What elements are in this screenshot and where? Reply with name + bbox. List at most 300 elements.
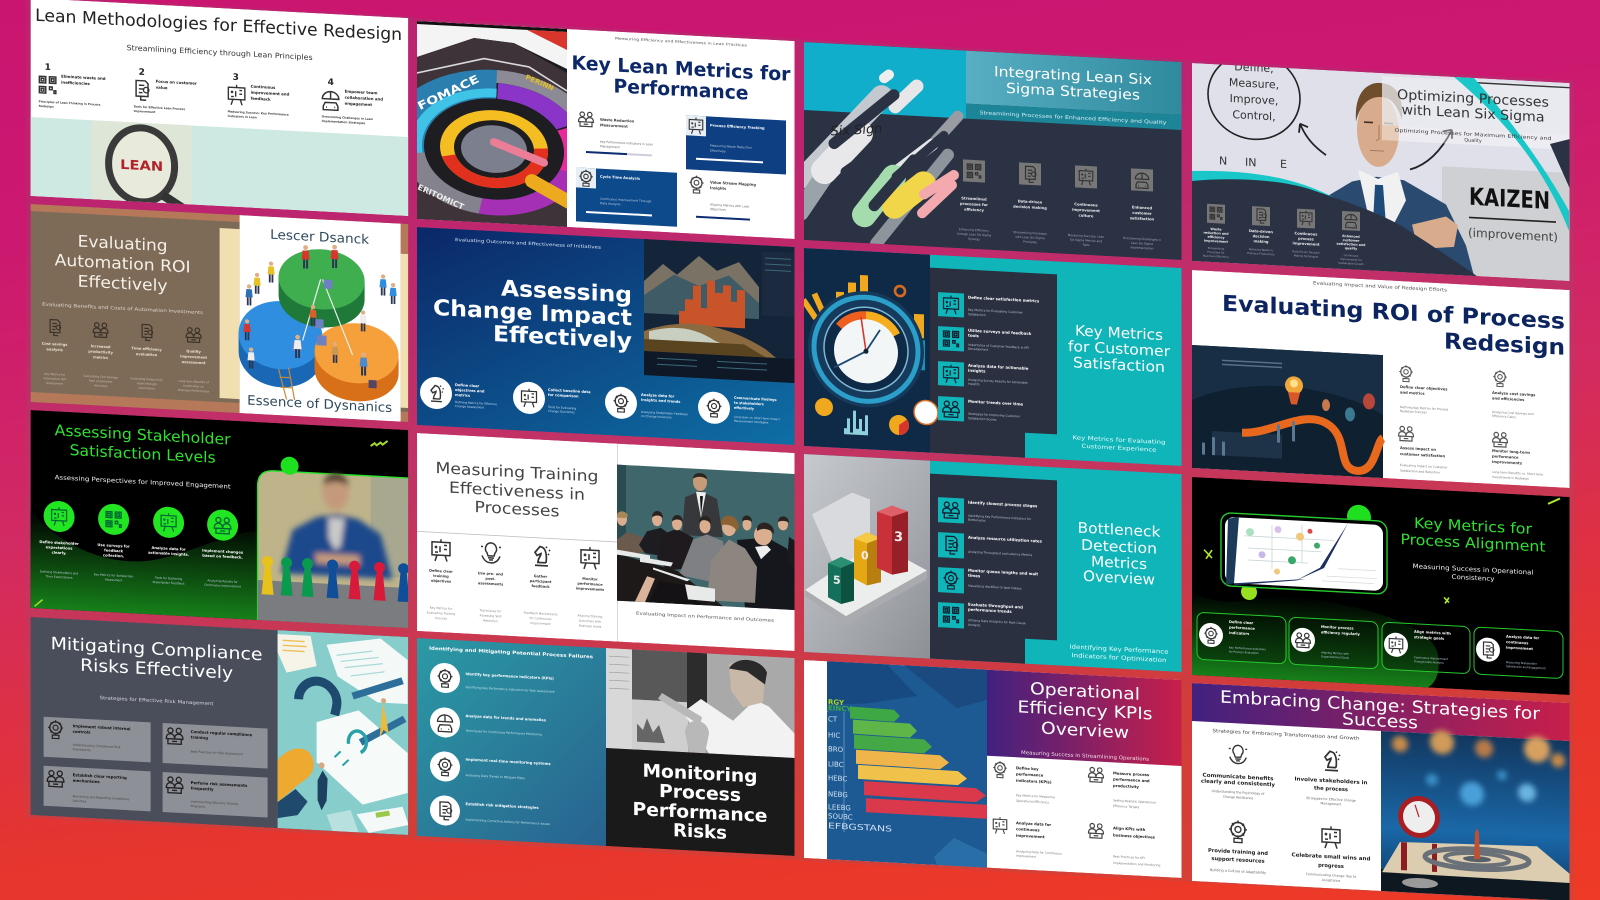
item: baseline bbox=[513, 381, 591, 417]
item: assessments bbox=[478, 542, 504, 624]
item: celebrate: Communicating Change: Key to bbox=[1306, 872, 1356, 879]
item: KPIs: Define key bbox=[1016, 765, 1039, 771]
chart: 3D bar chart: 5 bbox=[833, 574, 841, 587]
panel: Lean Methodologies slide bbox=[31, 0, 409, 220]
subtitle: Assessing Perspectives for Improved Engagement bbox=[55, 474, 231, 491]
item: queue: Visualizing Workflow to Spot Delays bbox=[968, 584, 1022, 591]
item: objectives: Evaluating Training bbox=[427, 611, 455, 616]
image: DMAIC whiteboard bbox=[1207, 51, 1558, 244]
step 2 bbox=[134, 67, 197, 116]
header band: Overview bbox=[1041, 719, 1129, 742]
step 1: inefficiencies bbox=[61, 80, 90, 86]
panel: Evaluating ROI of Process Redesign slide bbox=[1192, 270, 1570, 488]
panel: Assessing Change Impact slide bbox=[417, 227, 795, 445]
item: waste reduction: efficiency bbox=[1207, 235, 1225, 240]
card: risk assessments: frequently bbox=[191, 785, 214, 792]
item: data-driven: with Lean Six Sigma bbox=[1015, 235, 1045, 240]
item: objectives: Redesign Success bbox=[1400, 409, 1427, 414]
item: enhanced customer: Continuous bbox=[1344, 253, 1359, 258]
item: objectives: objectives bbox=[431, 579, 451, 584]
step 3: Indicators in Lean bbox=[228, 114, 257, 119]
item: continuous improvement: culture bbox=[1079, 214, 1094, 218]
chart: energy rating arrows: EFBGSTANS bbox=[828, 821, 892, 834]
item: queue bbox=[938, 566, 1038, 597]
subtitle: Strategies for Embracing Transformation and Growth bbox=[1212, 728, 1360, 742]
item: analyze: Analyzing Survey Results for Actionable bbox=[968, 378, 1028, 385]
image: DMAIC whiteboard: E bbox=[1280, 158, 1287, 171]
item: analyze: on Change Initiatives bbox=[641, 414, 672, 420]
title bbox=[433, 273, 633, 354]
item: surveys bbox=[94, 503, 133, 583]
item: monitor: Strategies for Improving Customer bbox=[968, 412, 1021, 418]
header band: Measuring Success in Streamlining Operations bbox=[1021, 750, 1149, 763]
title bbox=[996, 66, 1152, 102]
title panel: Risks bbox=[673, 820, 727, 844]
step 1 bbox=[39, 62, 106, 111]
item: surveys: Utilize surveys and feedback bbox=[968, 328, 1032, 336]
card: align: through Data Analysis bbox=[1414, 659, 1444, 665]
image: DMAIC whiteboard: IN bbox=[1245, 156, 1256, 169]
title: Processes bbox=[475, 498, 559, 521]
item: anomalies: Analyze data for trends and anomalies bbox=[466, 714, 547, 722]
step 1: Eliminate waste and bbox=[61, 74, 106, 81]
item: enhanced customer bbox=[1337, 211, 1366, 266]
subtitle: Streamlining Processes for Enhanced Efficiency and Quality bbox=[979, 110, 1167, 126]
panel: Operational Efficiency KPIs slide bbox=[804, 660, 1182, 878]
subtitle: Evaluating Impact and Value of Redesign Efforts bbox=[1313, 280, 1448, 294]
title: Mitigating Compliance bbox=[51, 634, 263, 665]
card: reporting: mechanisms bbox=[73, 778, 100, 784]
subtitle bbox=[1412, 562, 1534, 585]
panel: Embracing Change slide bbox=[1192, 683, 1570, 900]
item: analyze: continuous bbox=[1016, 826, 1040, 833]
item: quality: assessment bbox=[182, 360, 206, 365]
item: customer impact: Assess impact on bbox=[1400, 446, 1436, 452]
item: enhanced customer: quality bbox=[1345, 246, 1358, 251]
title: Measuring Training bbox=[436, 459, 599, 486]
footer text: Identifying Key Performance bbox=[1069, 644, 1169, 656]
item: objectives: Define clear objectives bbox=[1400, 385, 1448, 392]
step 4 bbox=[322, 77, 383, 126]
card: waste reduction bbox=[578, 112, 653, 157]
title bbox=[51, 634, 263, 685]
item: define metrics bbox=[938, 292, 1040, 321]
item: mitigation bbox=[430, 795, 550, 831]
item: streamlined: Enhancing Efficiency bbox=[959, 227, 989, 233]
item: analyze: insights bbox=[968, 368, 986, 374]
item: quality: Long-term Benefits of bbox=[178, 379, 210, 384]
item: data-driven bbox=[1247, 206, 1275, 256]
item: objectives: Define clear bbox=[455, 383, 480, 388]
item: anomalies: Techniques for Continuous Performance Monitoring bbox=[465, 729, 542, 737]
chart: energy rating arrows: EINCY bbox=[828, 704, 852, 714]
item: quality: Quality bbox=[186, 349, 202, 354]
card: risk assessments bbox=[163, 772, 268, 818]
step 4: 4 bbox=[328, 78, 334, 88]
chart: performance dial image: ERITOMICT bbox=[416, 183, 466, 212]
step 1: Redesign bbox=[39, 104, 54, 109]
item: productivity bbox=[1088, 767, 1156, 810]
item: assessments: Retention bbox=[483, 619, 498, 623]
panel: Assessing Stakeholder Satisfaction slide bbox=[31, 410, 410, 628]
item: anomalies bbox=[430, 707, 547, 743]
item: continuous improvement bbox=[1068, 165, 1104, 248]
card: value stream: Aligning Metrics with Lean bbox=[710, 203, 750, 209]
item: communicate: clearly and consistently bbox=[1201, 778, 1276, 788]
item: changes: Implement changes bbox=[202, 549, 244, 555]
chart: 3D bar chart: 3 bbox=[894, 530, 903, 545]
item: cost savings: Key Metrics for bbox=[44, 372, 66, 377]
item: monitor bbox=[938, 396, 1023, 425]
item: cost savings: Efficiency Gains bbox=[1492, 414, 1516, 419]
item: productivity: productivity bbox=[88, 350, 114, 355]
item: data-driven: Streamlining Processes bbox=[1013, 230, 1047, 236]
item: analyze: Analyzing Data for Continuous bbox=[1016, 849, 1062, 856]
card: reporting: Establish clear reporting bbox=[73, 772, 127, 780]
title: Lean Methodologies for Effective Redesign bbox=[35, 6, 402, 45]
item: feedback bbox=[524, 546, 558, 626]
footer text bbox=[1070, 644, 1169, 664]
panel: Measuring Training Effectiveness slide bbox=[417, 433, 795, 651]
item: training: Building a Culture of Adaptability bbox=[1210, 868, 1266, 875]
step 1: 1 bbox=[45, 63, 51, 73]
card: internal controls bbox=[44, 717, 151, 762]
item: slowest stages: Bottlenecks bbox=[968, 518, 986, 523]
image: compliance isometric illustration bbox=[278, 630, 409, 835]
item: feedback: for Continuous bbox=[529, 616, 552, 621]
header: Identifying and Mitigating Potential Process Failures bbox=[429, 646, 593, 660]
chart: gauge illustration bbox=[801, 272, 938, 439]
item: long-term: performance bbox=[1492, 454, 1519, 460]
item: communicate bbox=[1201, 743, 1276, 801]
item: analyze: improvement bbox=[1016, 833, 1045, 839]
image: data landscape bbox=[644, 239, 795, 383]
title: Automation ROI bbox=[55, 250, 191, 276]
header band: Efficiency KPIs bbox=[1017, 697, 1152, 723]
item: customer satisfaction: satisfaction bbox=[1130, 216, 1155, 222]
item: KPIs: Operational Efficiency bbox=[1016, 799, 1049, 804]
item: KPIs: indicators (KPIs) bbox=[1016, 778, 1052, 785]
item: objectives: Defining Key Metrics for Process bbox=[1400, 405, 1449, 412]
image: dartboard and scale photo bbox=[1381, 727, 1570, 900]
item: define expectations: expectations bbox=[46, 545, 73, 551]
card: training: training bbox=[191, 734, 208, 740]
title: Assessing Stakeholder bbox=[55, 421, 231, 449]
item: time efficiency: Evaluating Productivity bbox=[130, 376, 163, 382]
item: surveys: Key Metrics for Satisfaction bbox=[94, 572, 133, 578]
item: waste reduction: Streamlining bbox=[1208, 246, 1225, 251]
card: align: Align metrics with bbox=[1414, 630, 1451, 636]
item: objectives bbox=[427, 539, 455, 621]
title: Key Metrics bbox=[1075, 323, 1163, 344]
item: surveys: collection. bbox=[103, 553, 125, 558]
item: training bbox=[1208, 819, 1268, 875]
item: cost savings: Automation ROI bbox=[44, 376, 66, 381]
item: streamlined: through Lean Six Sigma bbox=[957, 232, 991, 237]
step 3: Continuous bbox=[251, 84, 276, 90]
item: celebrate: Acceptance bbox=[1322, 878, 1340, 883]
title bbox=[1400, 515, 1546, 556]
item: continuous improvement: improvement bbox=[1072, 208, 1100, 213]
chart: performance dial image: FOMACE bbox=[415, 72, 481, 113]
item: data-driven: Reducing Waste to bbox=[1249, 247, 1274, 252]
item: productivity bbox=[83, 322, 118, 389]
footer text: Indicators for Optimization bbox=[1072, 652, 1167, 664]
item: cost savings bbox=[42, 319, 67, 386]
item: surveys: feedback bbox=[104, 548, 124, 553]
item: productivity: Initiatives bbox=[94, 383, 108, 388]
title panel: Optimizing Processes bbox=[1397, 87, 1549, 111]
chart: energy rating arrows: HIC bbox=[828, 731, 840, 740]
panel: Key Lean Metrics slide bbox=[386, 19, 795, 243]
step 3: feedback bbox=[251, 96, 271, 102]
caption: Evaluating Impact on Performance and Outcomes bbox=[636, 611, 775, 624]
item: surveys: Importance of Customer Feedback in KPI bbox=[968, 343, 1029, 350]
title: Evaluating ROI of Process bbox=[1222, 292, 1565, 335]
card: value stream: Insights bbox=[710, 186, 726, 191]
panel: Optimizing Processes slide bbox=[1192, 50, 1570, 281]
card: waste reduction: Waste Reduction bbox=[600, 118, 635, 124]
card: internal controls: controls bbox=[73, 729, 91, 735]
subtitle: Consistency bbox=[1452, 573, 1495, 583]
item: time efficiency: Automation bbox=[138, 386, 155, 391]
image: DMAIC whiteboard: N bbox=[1219, 154, 1227, 168]
title: Assessing bbox=[501, 276, 632, 308]
title: Overview bbox=[1083, 569, 1155, 589]
item: continuous improvement: Six Sigma Metrics and bbox=[1070, 238, 1102, 243]
item: define expectations: Their Expectations bbox=[45, 574, 73, 580]
item: continuous process: Continuous bbox=[1295, 231, 1317, 237]
item: celebrate bbox=[1292, 824, 1371, 884]
item: baseline: Collect baseline data bbox=[548, 388, 591, 394]
panel: Mitigating Compliance Risks slide bbox=[31, 617, 409, 835]
card: analyze: improvement bbox=[1506, 646, 1533, 651]
card: align: strategic goals bbox=[1414, 635, 1444, 641]
footer text: Key Metrics for Evaluating bbox=[1072, 435, 1166, 446]
item: real-time: Analyzing Data Trends to Mitigate Risks bbox=[466, 773, 525, 780]
item: KPIs: performance bbox=[1016, 771, 1044, 778]
header band bbox=[966, 51, 1182, 130]
item: communicate: effectively bbox=[734, 406, 755, 411]
card: analyze: Satisfaction and Engagement bbox=[1506, 664, 1546, 670]
title panel: Optimizing Processes for Maximum Efficiency and bbox=[1394, 128, 1552, 142]
chart: energy rating arrows: HEBC bbox=[828, 774, 847, 783]
image: scientist black and white photo bbox=[606, 648, 795, 758]
subtitle: Measuring Success in Operational bbox=[1412, 562, 1534, 577]
step 2: 2 bbox=[139, 68, 145, 78]
item: monitor: Monitor trends over time bbox=[968, 399, 1023, 407]
card: analyze: Measuring Stakeholder bbox=[1506, 660, 1538, 666]
card: monitor: efficiency regularly bbox=[1321, 630, 1361, 636]
card: training bbox=[163, 723, 268, 769]
item: monitor: Satisfaction Scores bbox=[968, 416, 997, 422]
item: productivity: metrics bbox=[93, 355, 108, 360]
item: define metrics: Satisfaction bbox=[968, 312, 986, 317]
title: Integrating Lean Six bbox=[994, 64, 1152, 88]
item: customer impact: customer satisfaction bbox=[1400, 452, 1445, 458]
item: mitigation: Implementing Corrective Actions for Performance Issues bbox=[466, 818, 550, 826]
panel: Evaluating Automation ROI slide bbox=[31, 204, 409, 422]
item: customer satisfaction: Lean Six Sigma bbox=[1131, 241, 1153, 246]
card: reporting: Monitoring and Reporting Compliance bbox=[73, 794, 130, 801]
image: DMAIC whiteboard: Improve, bbox=[1230, 92, 1278, 108]
item: continuous process bbox=[1292, 208, 1320, 259]
card: risk assessments: Programs bbox=[191, 804, 205, 809]
header band bbox=[987, 670, 1182, 766]
item: KPIs: Identifying Key Performance Indicators for Risk Assessment bbox=[466, 685, 556, 694]
item: waste reduction: improvement bbox=[1204, 239, 1228, 244]
item: communicate: Change Resistance bbox=[1223, 795, 1253, 800]
subtitle: Measuring Efficiency and Effectiveness in Lean Practices bbox=[615, 36, 747, 47]
item: data-driven: Data-driven bbox=[1018, 199, 1043, 205]
item: real-time: Implement real-time monitoring systems bbox=[466, 758, 551, 766]
item: productivity: Measure process bbox=[1113, 770, 1150, 777]
item: analyze: Analyze data for bbox=[1016, 820, 1051, 827]
item: enhanced customer: customer bbox=[1343, 238, 1360, 243]
item: long-term bbox=[1492, 432, 1543, 482]
image: striped puzzle photo bbox=[800, 70, 958, 248]
title bbox=[573, 55, 790, 100]
title panel: with Lean Six Sigma bbox=[1401, 102, 1544, 126]
step 4: Overcoming Challenges in Lean bbox=[322, 114, 373, 121]
item: analyze: Stakeholder Feedback bbox=[153, 580, 185, 586]
item: customer satisfaction: customer bbox=[1132, 211, 1152, 216]
item: objectives: Change Assessment bbox=[455, 404, 485, 410]
item: communicate bbox=[698, 391, 781, 427]
item: celebrate: progress bbox=[1318, 863, 1344, 870]
header band: Embracing Change: Strategies for bbox=[1220, 687, 1540, 724]
card: reporting: Activities bbox=[73, 799, 87, 803]
item: cost savings: Cost savings bbox=[42, 342, 67, 347]
item: assessments: Assessing Skill bbox=[480, 613, 502, 618]
item: monitor: Outcomes with bbox=[579, 619, 601, 624]
item: enhanced customer: Enhanced bbox=[1342, 234, 1360, 239]
item: align bbox=[1088, 823, 1160, 867]
item: KPIs bbox=[993, 761, 1055, 805]
item: KPIs: Key Metrics for Measuring bbox=[1016, 793, 1055, 799]
title panel: Quality bbox=[1464, 137, 1482, 144]
item: surveys bbox=[938, 326, 1032, 355]
item: productivity: Calculating Cost Savings bbox=[83, 374, 118, 380]
item: changes: Analyzing Results for bbox=[207, 578, 239, 584]
item: data-driven: decision bbox=[1253, 234, 1270, 239]
title: Risks Effectively bbox=[80, 656, 233, 684]
item: analyze: Analyze data for actionable bbox=[968, 363, 1029, 371]
item: data-driven: Data-driven bbox=[1249, 229, 1273, 234]
item: continuous process: improvement bbox=[1292, 241, 1320, 247]
card: process efficiency: Measuring Waste Reduction bbox=[710, 144, 752, 150]
image: striped puzzle photo: Six Sign bbox=[830, 122, 883, 139]
item: customer satisfaction: Enhanced bbox=[1132, 205, 1152, 210]
item: cost savings: and efficiencies bbox=[1492, 396, 1525, 402]
item: define expectations: Define stakeholder bbox=[39, 540, 79, 546]
item: monitor: Business Goals bbox=[579, 624, 602, 629]
subtitle: Evaluating Benefits and Costs of Automation Investments bbox=[42, 302, 204, 316]
item: communicate: Communicate findings bbox=[734, 396, 777, 402]
item: objectives: Key Metrics for bbox=[430, 606, 453, 611]
item: KPIs bbox=[430, 662, 556, 699]
item: streamlined: Synergy bbox=[968, 237, 980, 241]
item: monitor: performance bbox=[577, 582, 603, 587]
subtitle: Evaluating Outcomes and Effectiveness of Initiatives bbox=[455, 237, 602, 251]
item: objectives: metrics bbox=[455, 393, 470, 398]
item: surveys: Use surveys for bbox=[97, 543, 130, 549]
item: analyze: Analyzing Stakeholder Feedback bbox=[641, 410, 688, 416]
step 4: collaboration and bbox=[345, 95, 383, 102]
item: analyze: Tools for Gathering bbox=[154, 576, 182, 581]
header band: Success bbox=[1342, 709, 1418, 733]
card: internal controls: Understanding Compliance Risk bbox=[73, 743, 121, 749]
image: DMAIC whiteboard: KAIZEN bbox=[1469, 183, 1550, 215]
step 4: Implementation Strategies bbox=[322, 119, 366, 125]
item: data-driven: decision making bbox=[1013, 205, 1047, 210]
title panel: Performance bbox=[632, 799, 767, 827]
card: monitor bbox=[1289, 617, 1378, 669]
image: blurred man with pawns bbox=[35, 422, 410, 628]
item: enhanced customer: satisfaction and bbox=[1337, 242, 1366, 247]
chart: energy rating arrows: NEBG bbox=[828, 790, 848, 799]
item: time efficiency: evaluation bbox=[136, 352, 158, 357]
header band: Operational bbox=[1030, 679, 1140, 704]
item: KPIs: Identify key performance indicators (KPIs) bbox=[466, 672, 554, 681]
card: cycle time: Continuous Improvement Through bbox=[600, 197, 652, 203]
item: analyze: actionable insights. bbox=[148, 551, 190, 557]
item: mitigation: Establish risk mitigation strategies bbox=[466, 802, 539, 810]
title: Detection bbox=[1081, 538, 1157, 558]
card: performance indicators: for Process Evaluation bbox=[1229, 649, 1259, 655]
item: monitor: improvements bbox=[576, 586, 604, 592]
item: slowest stages bbox=[938, 497, 1038, 527]
item: analyze: Improvement bbox=[1016, 854, 1037, 859]
item: analyze bbox=[938, 361, 1029, 390]
item: data-driven bbox=[1013, 162, 1047, 245]
item: cost savings bbox=[1492, 370, 1536, 420]
subtitle: Strategies for Effective Risk Management bbox=[100, 695, 214, 707]
item: involve: the process bbox=[1314, 785, 1348, 793]
card: training: Conduct regular compliance bbox=[191, 729, 252, 737]
icon: LEAN magnifier: LEAN bbox=[120, 158, 163, 175]
card: analyze bbox=[1474, 627, 1563, 679]
item: communicate: Understanding the Psychology of bbox=[1212, 789, 1265, 796]
item: quality: Automation vs. bbox=[183, 384, 204, 389]
title: Key Lean Metrics for bbox=[572, 52, 791, 86]
image: 3D pie chart with people: Lescer Dsanck bbox=[270, 228, 370, 248]
item: enhanced customer: Improvement for bbox=[1340, 257, 1363, 262]
item: communicate: Measurement Strategies bbox=[734, 419, 769, 425]
title: Metrics bbox=[1091, 554, 1147, 573]
chart: 3D bar chart: 0 bbox=[861, 549, 869, 562]
item: data-driven: Principles bbox=[1023, 240, 1037, 244]
item: cost savings: analysis bbox=[46, 347, 63, 352]
title: Evaluating bbox=[78, 232, 168, 255]
image: DMAIC whiteboard: Measure, bbox=[1229, 76, 1279, 92]
step 1: Principles of Lean Thinking in Process bbox=[39, 99, 101, 107]
step 3: improvement and bbox=[251, 90, 290, 97]
card: process efficiency bbox=[686, 115, 786, 175]
card: value stream: Value Stream Mapping bbox=[710, 181, 756, 187]
title bbox=[436, 459, 598, 523]
item: productivity: Setting Realistic Operational bbox=[1113, 798, 1156, 805]
item: assessments: assessments bbox=[478, 581, 503, 587]
title panel bbox=[1382, 73, 1570, 231]
item: baseline: Change Outcomes bbox=[548, 409, 575, 414]
icon: LEAN magnifier bbox=[109, 126, 183, 208]
item: surveys: Development bbox=[968, 347, 989, 352]
item: waste reduction: Maximum Efficiency bbox=[1203, 254, 1229, 259]
item: surveys: Assessment bbox=[105, 577, 123, 582]
item: feedback: Improvement bbox=[530, 621, 551, 626]
step 2: value bbox=[156, 85, 168, 90]
